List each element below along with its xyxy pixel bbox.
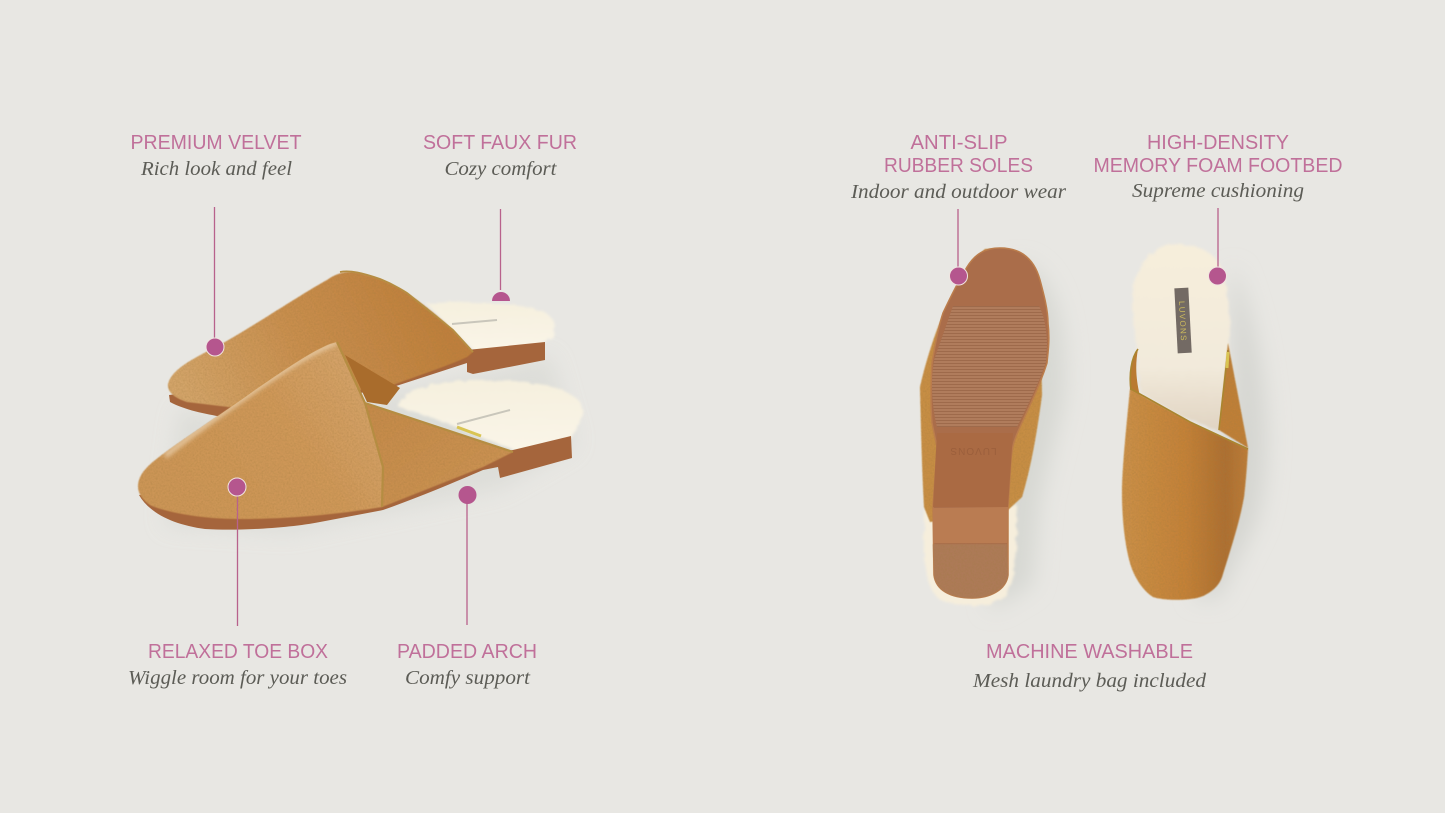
back slipper fur lining <box>427 302 555 353</box>
brand label: LUVONS <box>1177 301 1188 342</box>
subtext: Indoor and outdoor wear <box>850 181 1067 203</box>
heel block <box>933 507 1008 543</box>
leader line <box>957 209 959 272</box>
brand label <box>1174 288 1192 353</box>
seams <box>1130 349 1248 449</box>
marker dot <box>492 292 510 301</box>
marker dot <box>458 486 476 504</box>
leader line <box>236 490 238 626</box>
velvet vamp <box>1122 389 1248 600</box>
back slipper heel and sole <box>169 342 545 417</box>
heading: MACHINE WASHABLE <box>986 641 1193 663</box>
heel breast <box>933 433 1013 507</box>
sole outline <box>931 248 1049 598</box>
subtext: Cozy comfort <box>444 158 558 180</box>
back slipper insole sliver <box>452 320 497 324</box>
velvet upper behind sole <box>920 248 1042 522</box>
callout: premium velvet <box>130 132 302 356</box>
leader line <box>1217 208 1219 272</box>
subtext: Rich look and feel <box>140 158 292 180</box>
heading: PADDED ARCH <box>397 641 537 663</box>
callout: memory foam footbed <box>1094 132 1342 285</box>
marker dot <box>228 478 246 496</box>
back slipper velvet upper <box>168 272 473 408</box>
callout: anti-slip rubber soles <box>850 132 1067 285</box>
subtext: Wiggle room for your toes <box>128 667 347 689</box>
heading: SOFT FAUX FUR <box>423 132 577 154</box>
heading: RELAXED TOE BOX <box>148 641 328 663</box>
subtext: Comfy support <box>405 667 531 689</box>
front slipper heel and sole <box>139 436 572 530</box>
callout: padded arch <box>397 486 537 689</box>
front slipper insole sliver <box>457 410 510 424</box>
front slipper fur lining <box>397 380 583 452</box>
leader line <box>214 207 216 345</box>
callout: machine washable <box>972 641 1207 692</box>
ribbed tread <box>932 306 1047 427</box>
heading: HIGH-DENSITY <box>1147 132 1289 154</box>
fur at heel <box>924 505 1017 606</box>
subtext: Supreme cushioning <box>1132 180 1304 202</box>
product photo: top view slipper <box>1122 245 1267 600</box>
gold tab <box>1227 352 1228 368</box>
heading: ANTI-SLIP <box>910 132 1008 154</box>
gold tab <box>457 427 481 436</box>
callout: soft faux fur <box>423 132 577 301</box>
front slipper vamp <box>138 342 383 519</box>
fur footbed <box>1132 245 1230 432</box>
marker dot <box>950 267 968 285</box>
back slipper inner wall <box>345 355 400 405</box>
collar wrap <box>1130 349 1140 396</box>
subtext: Mesh laundry bag included <box>972 670 1207 692</box>
heel top lift <box>933 544 1008 598</box>
callout: relaxed toe box <box>128 478 347 689</box>
front slipper seams <box>337 342 513 507</box>
product photo: side view of slipper pair <box>138 271 583 532</box>
leader line <box>466 498 468 625</box>
vamp edge highlight <box>165 342 337 456</box>
inner quarter <box>1219 343 1248 448</box>
marker dot <box>206 338 224 356</box>
heading line two: RUBBER SOLES <box>884 155 1033 177</box>
back slipper seam <box>340 271 473 352</box>
product photo: sole view slipper <box>920 248 1065 610</box>
marker dot <box>1208 267 1226 285</box>
leader line <box>500 209 502 290</box>
heel logo: LUVONS <box>949 445 997 456</box>
heading: PREMIUM VELVET <box>130 132 302 154</box>
heading line two: MEMORY FOAM FOOTBED <box>1094 155 1342 177</box>
front slipper quarter <box>365 403 513 507</box>
